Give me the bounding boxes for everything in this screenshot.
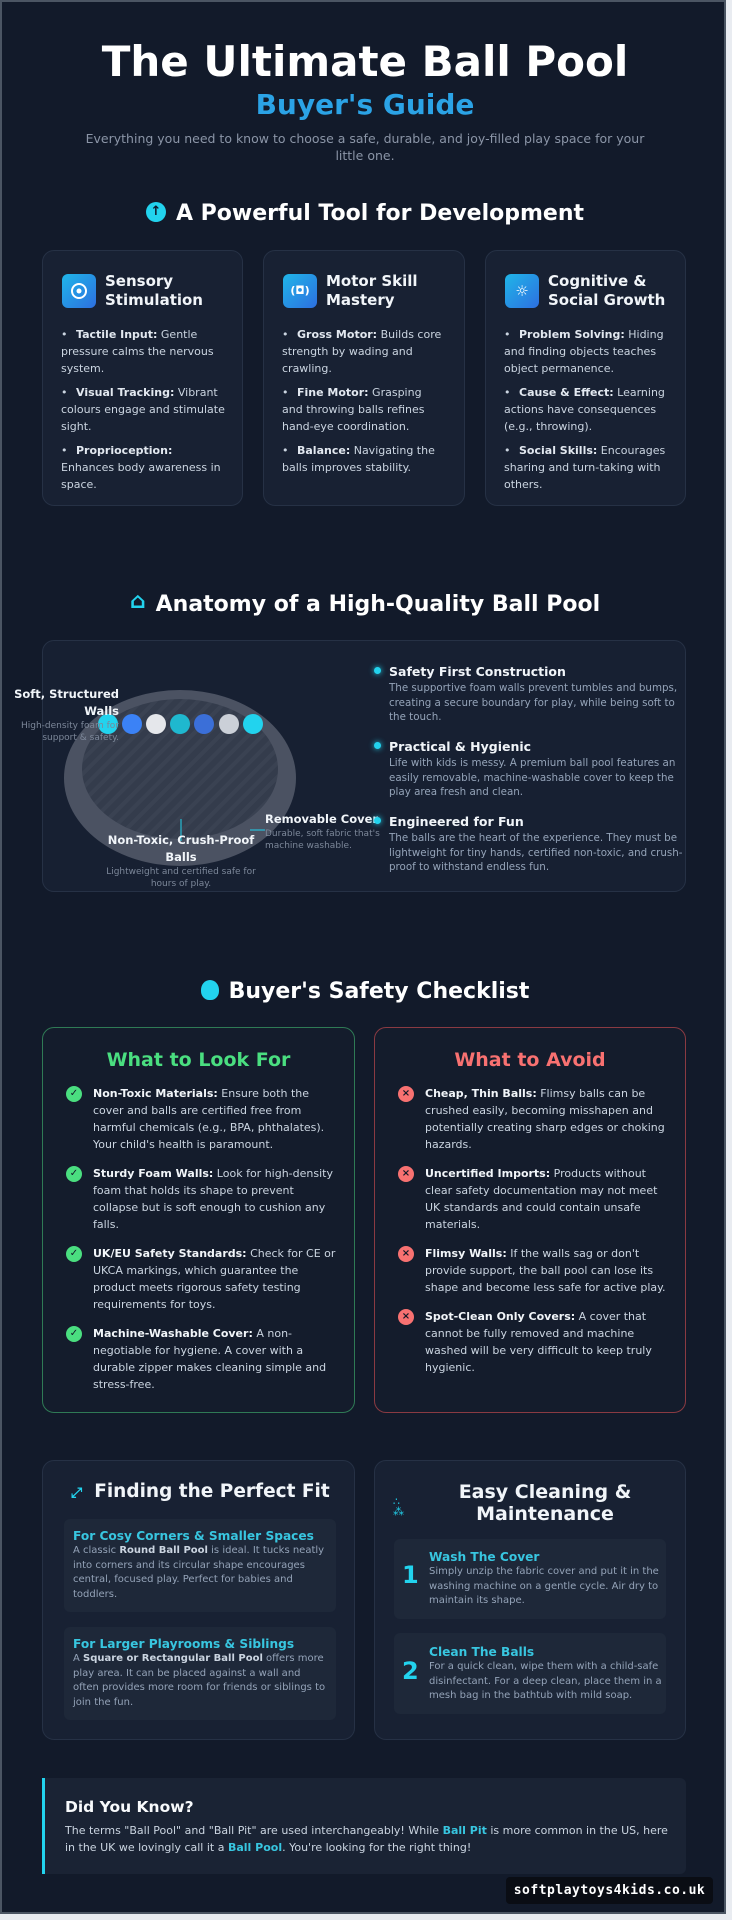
callout: did you know: Did You Know? [65,1798,194,1816]
bullets: Cause & Effect: Learning actions have consequences (e.g., throwing). [504,386,665,433]
panel: look for: ✓ [70,1248,78,1259]
heading: development: ↑ [151,204,161,219]
panel: avoid: Flimsy Walls: If the walls sag or don't provide support, the ball pool can lose its shape and become less safe for active play. [425,1247,666,1294]
option: small spaces: For Cosy Corners & Smaller Spaces [73,1529,314,1543]
panel: avoid [374,1027,686,1413]
heading: What to Avoid [454,1049,606,1071]
heading: anatomy: ⌂ [130,589,146,614]
panel: look for: ✓ [70,1168,78,1179]
card title: Social Growth [548,291,665,309]
panel: look for: UK/EU Safety Standards: Check for CE or UKCA markings, which guarantee the product meets rigorous safety testing requirements for toys. [93,1247,335,1311]
callout: did you know [42,1778,686,1874]
label: balls: Non-Toxic, Crush-Proof Balls [108,833,254,864]
panel: avoid: × [402,1088,410,1099]
label: cover: Removable Cover [265,812,378,826]
option: small spaces: A classic Round Ball Pool is ideal. It tucks neatly into corners and its circular shape encourages central, focused play. Perfect for babies and toddlers. [73,1545,324,1600]
bullets [282,328,441,474]
option: small spaces [64,1519,336,1612]
feature: hygienic: Practical & Hygienic [389,739,531,754]
icon: sparkle [393,1495,404,1518]
card title [105,272,203,309]
panel: avoid: × [402,1248,410,1259]
feature: safety [370,663,677,723]
bullets: Visual Tracking: Vibrant colours engage and stimulate sight. [61,386,225,433]
feature: fun: The balls are the heart of the experience. They must be lightweight for tiny hands, certified non-toxic, and crush-proof to withstand endless fun. [389,832,683,873]
panel: look for [42,1027,355,1413]
card title: Motor Skill [326,272,418,290]
panel: look for: Non-Toxic Materials: Ensure both the cover and balls are certified free from harmful chemicals (e.g., BPA, phthalates). Your child's health is paramount. [93,1087,324,1151]
step 1 [394,1539,666,1619]
heading: Maintenance [476,1503,614,1525]
icon: motion: (◘) [290,284,310,297]
panel: avoid: × [402,1311,410,1322]
panel: look for: ✓ [70,1088,78,1099]
bullets: Fine Motor: Grasping [297,386,422,399]
bullets: and throwing balls refines hand-eye coordination. [282,403,425,433]
card title: Mastery [326,291,394,309]
intro text: Everything you need to know to choose a safe, durable, and joy-filled play space for your little one. [86,131,644,163]
feature: fun: Engineered for Fun [389,814,524,829]
panel: motor [263,250,465,506]
panel: avoid: Uncertified Imports: Products without clear safety documentation may not meet UK standards and could contain unsafe materials. [425,1167,657,1231]
footer badge [506,1877,713,1904]
panel: sensory [42,250,243,506]
title: The Ultimate Ball Pool [102,37,628,86]
bullets [61,328,225,491]
panel: avoid: × [402,1168,410,1179]
diagram: ball pool [64,690,296,866]
icon: sparkle: ∴ [393,1495,400,1508]
label: walls: Soft, Structured Walls [14,687,119,718]
label: cover [265,812,380,851]
label: balls: Lightweight and certified safe for hours of play. [106,867,256,889]
label: walls: High-density foam for support & safety. [21,721,119,743]
panel: anatomy [42,640,686,892]
step 2: 2 [402,1657,419,1685]
heading: development: A Powerful Tool for Development [176,201,584,226]
panel: avoid: Cheap, Thin Balls: Flimsy balls can be crushed easily, becoming misshapen and potentially creating sharp edges or choking hazards. [425,1087,665,1151]
panel: perfect fit [42,1460,355,1740]
heading: Easy Cleaning & [459,1481,631,1503]
bullets: Enhances body awareness in space. [61,461,221,491]
option: larger rooms [64,1627,336,1720]
option: larger rooms: For Larger Playrooms & Siblings [73,1637,294,1651]
heading: ⤢ Finding the Perfect Fit [71,1481,330,1502]
bullets: Tactile Input: Gentle pressure calms the nervous system. [61,328,214,375]
panel: look for: ✓ [70,1328,78,1339]
option: larger rooms: A Square or Rectangular Ball Pool offers more play area. It can be placed against a wall and often provides more room for friends or siblings to join the fun. [73,1653,325,1708]
card title: Cognitive & [548,272,646,290]
step 1: Simply unzip the fabric cover and put it in the washing machine on a gentle cycle. Air dry to maintain its shape. [429,1566,659,1606]
list [66,1086,336,1391]
bullets: Social Skills: Encourages sharing and turn-taking with others. [504,444,665,491]
step 1: 1 [402,1561,419,1589]
bullets: Gross Motor: Builds core strength by wading and crawling. [282,328,441,375]
card title: Stimulation [105,291,203,309]
card title: Sensory [105,272,173,290]
subtitle heading: Buyer's Guide [256,88,474,121]
card title [326,272,418,309]
step 2: Clean The Balls [429,1645,534,1659]
feature: fun [370,813,683,873]
step 2 [394,1633,666,1714]
feature: safety: Safety First Construction [389,664,566,679]
panel: cognitive [485,250,686,506]
feature: safety: The supportive foam walls prevent tumbles and bumps, creating a secure boundary for play, while being soft to the touch. [389,682,677,723]
bullets: Balance: Navigating the balls improves stability. [282,444,435,474]
icon: eye [62,274,96,308]
icon: bulb: ☼ [515,282,529,300]
label: cover: Durable, soft fabric that's machine washable. [265,829,380,851]
list [398,1086,666,1374]
label: balls [106,833,256,889]
bullets: Proprioception: [76,444,172,457]
panel: look for: Machine-Washable Cover: A non-negotiable for hygiene. A cover with a durable zipper makes cleaning simple and stress-free. [93,1327,326,1391]
callout: did you know: The terms "Ball Pool" and "Ball Pit" are used interchangeably! While Ball Pit is more common in the US, here in the UK we lovingly call it a Ball Pool. You're looking for the right thing! [65,1824,668,1854]
heading: safety checklist: Buyer's Safety Checklist [229,979,529,1004]
footer badge: softplaytoys4kids.co.uk [514,1883,705,1898]
panel: look for: Sturdy Foam Walls: Look for high-density foam that holds its shape to prevent collapse but is soft enough to cushion any falls. [93,1167,333,1231]
step 1: Wash The Cover [429,1550,539,1564]
bullets: Problem Solving: Hiding and finding objects teaches object permanence. [504,328,664,375]
feature: hygienic [370,738,675,798]
bullets [504,328,665,491]
panel: avoid: Spot-Clean Only Covers: A cover that cannot be fully removed and machine washed will be very difficult to keep truly hygienic. [425,1310,652,1374]
feature: hygienic: Life with kids is messy. A premium ball pool features an easily removable, machine-washable cover to keep the play area fresh and clean. [389,757,675,798]
step 2: For a quick clean, wipe them with a child-safe disinfectant. For a deep clean, place them in a mesh bag in the bathtub with mild soap. [429,1661,662,1701]
heading: What to Look For [107,1049,290,1071]
heading [459,1481,631,1525]
panel: cleaning [374,1460,686,1740]
label: walls [14,687,119,743]
icon: motion [283,274,317,308]
icon: sparkle: ⁂ [393,1505,404,1518]
icon: bulb [505,274,539,308]
heading: anatomy: Anatomy of a High-Quality Ball Pool [156,592,600,617]
card title [548,272,665,309]
